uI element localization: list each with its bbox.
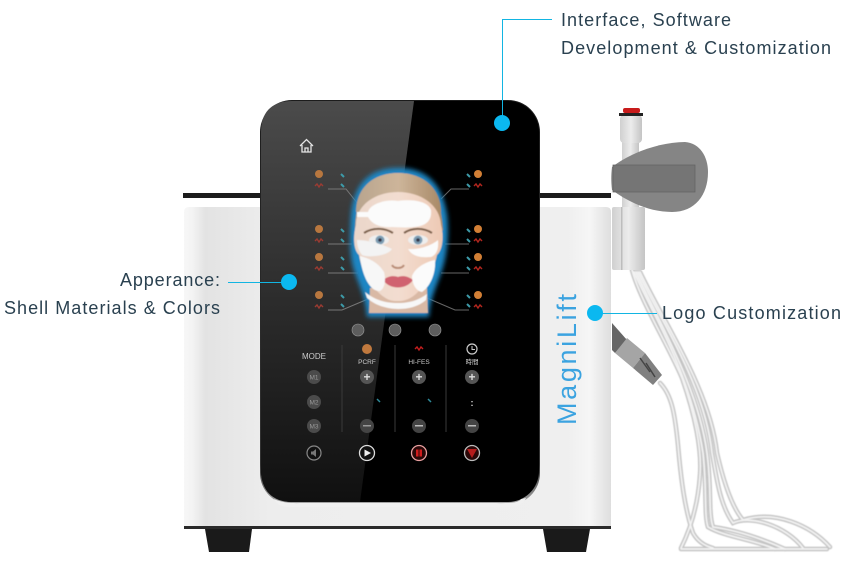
patch: forehead xyxy=(357,200,431,227)
control: MODE column: M2 xyxy=(309,400,319,406)
patch: chin xyxy=(365,292,427,309)
top black strip xyxy=(183,193,611,198)
control: MODE column xyxy=(302,352,326,433)
callout: interface and software: Interface, Software xyxy=(561,10,731,30)
face glow xyxy=(350,168,448,317)
callout: interface and software xyxy=(494,10,831,131)
screen glass xyxy=(261,101,539,502)
cable bundle xyxy=(632,270,830,549)
icon: home xyxy=(300,140,313,152)
patch: right eye xyxy=(408,240,438,257)
sleeve xyxy=(612,207,645,270)
callout: appearance: Shell Materials & Colors xyxy=(4,298,220,318)
patch: left cheek xyxy=(360,256,385,291)
device base unit xyxy=(183,193,611,552)
button: pause xyxy=(412,446,426,460)
control: time column: + xyxy=(468,370,476,384)
handle stem xyxy=(619,108,643,210)
callout: logo customization: Logo Customization xyxy=(662,303,841,323)
hair xyxy=(355,173,443,232)
touch screen xyxy=(260,100,540,507)
grey grip xyxy=(611,142,708,212)
neck xyxy=(369,288,428,313)
callout: appearance xyxy=(4,270,297,318)
skin xyxy=(354,192,443,301)
control column dividers xyxy=(342,345,446,432)
button: sound xyxy=(307,446,321,460)
eyes xyxy=(364,229,432,245)
face illustration xyxy=(350,168,448,317)
connector xyxy=(612,323,662,385)
foot: right xyxy=(543,529,590,552)
patch: right cheek xyxy=(412,260,435,292)
body zone selectors xyxy=(352,324,441,336)
control: HI-FES column: + xyxy=(415,370,423,384)
panel: left zone indicators xyxy=(315,170,368,310)
device body xyxy=(184,207,611,526)
patch: left eye xyxy=(357,240,392,256)
callout: interface and software: Development & Customization xyxy=(561,38,831,58)
screen bezel xyxy=(260,100,540,505)
bottom chrome edge xyxy=(274,498,526,507)
nose xyxy=(392,265,404,268)
callout: appearance: Apperance: xyxy=(120,270,220,290)
glass reflection xyxy=(261,101,414,502)
lips xyxy=(383,276,413,288)
control: PCRF column: + xyxy=(363,370,371,384)
handpiece with cables xyxy=(611,108,830,549)
control: HI-FES column: HI-FES xyxy=(408,359,430,366)
control: PCRF column: PCRF xyxy=(358,359,376,366)
button: play xyxy=(360,446,374,460)
foot: left xyxy=(205,529,252,552)
control: time column: 時間 xyxy=(466,358,478,366)
control: MODE column: M1 xyxy=(309,374,319,382)
control: PCRF column xyxy=(358,344,380,433)
control: MODE column: MODE xyxy=(302,352,326,361)
control: HI-FES column xyxy=(408,347,431,433)
panel: right zone indicators xyxy=(427,170,482,310)
control: MODE column: M3 xyxy=(309,424,319,430)
button: stop xyxy=(464,446,480,460)
logo text: MagniLift xyxy=(552,294,582,425)
control: time column xyxy=(465,344,479,433)
control: time column: : xyxy=(470,398,474,408)
